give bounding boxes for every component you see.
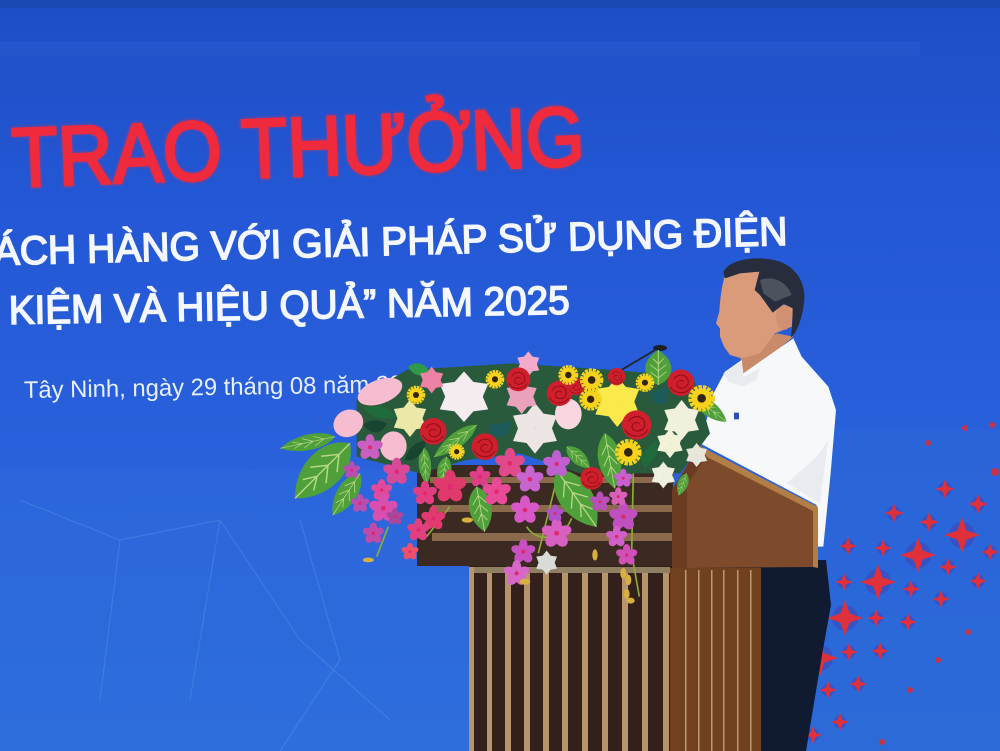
podium rails: [430, 477, 673, 541]
magenta orchid cascades: [342, 434, 639, 587]
neck: [740, 333, 793, 373]
dark leaves and top leaf: [363, 363, 668, 468]
microphone: [618, 345, 667, 372]
podium: [417, 445, 818, 751]
speaker head and shirt: [697, 258, 836, 547]
hair: [723, 258, 804, 337]
red star pattern: [802, 422, 999, 745]
ear: [776, 305, 792, 330]
heading: TRAO THƯỞNG: TRAO THƯỞNG: [10, 89, 586, 205]
white shirt: [697, 338, 836, 547]
shirt shading: [723, 362, 828, 503]
subtitle line 1: ÁCH HÀNG VỚI GIẢI PHÁP SỬ DỤNG ĐIỆN: [0, 208, 788, 274]
trousers: [760, 560, 831, 751]
flower arrangement: [279, 350, 731, 604]
lilies: [390, 351, 709, 575]
podium top band: [417, 465, 673, 566]
sunflowers: [409, 367, 712, 462]
stems: [377, 473, 639, 597]
shirt pen: [734, 413, 739, 419]
red roses: [420, 367, 694, 490]
green leaves: [279, 350, 731, 536]
podium lectern head: [672, 447, 707, 568]
speaker: [618, 258, 836, 751]
face: [716, 272, 793, 358]
pink calla flowers: [328, 372, 582, 461]
subtitle line 2: KIỆM VÀ HIỆU QUẢ” NĂM 2025: [8, 277, 570, 333]
place and date: Tây Ninh, ngày 29 tháng 08 năm 2025: [24, 371, 429, 404]
podium slatted column: [469, 566, 761, 751]
flower buds: [363, 517, 635, 604]
foliage mass: [357, 363, 710, 473]
hair highlight: [760, 278, 792, 302]
heading: TRAO THƯỞNG: TRAO THƯỞNG: [10, 89, 586, 205]
